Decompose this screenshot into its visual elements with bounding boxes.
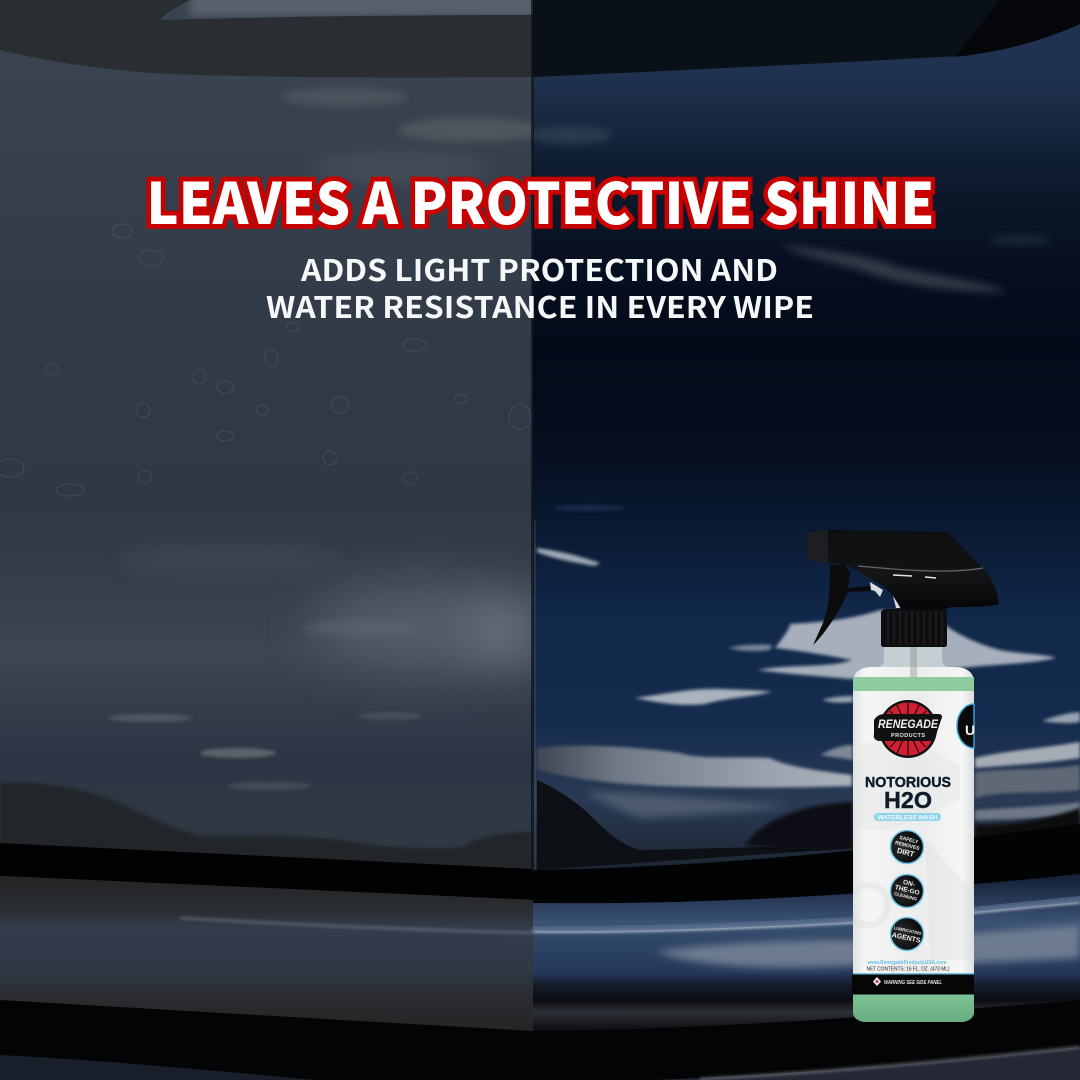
website and net contents: NET CONTENTS: 16 FL. OZ. (473 ML) bbox=[866, 966, 950, 972]
badge: safely removes dirt: REMOVES bbox=[894, 840, 921, 852]
product name bbox=[865, 775, 951, 813]
panel: glossy right half of car hood bbox=[533, 0, 1080, 870]
product name: H2O bbox=[884, 787, 932, 813]
sky clouds reflection bbox=[537, 548, 1080, 870]
trigger lever bbox=[813, 565, 871, 645]
subtitle: ADDS LIGHT PROTECTION AND bbox=[300, 246, 778, 290]
spray trigger head bbox=[807, 530, 999, 645]
badge: lubricating agents: LUBRICATING bbox=[893, 925, 922, 936]
liquid bottom bbox=[853, 994, 974, 1022]
badge: safely removes dirt: DIRT bbox=[896, 846, 916, 859]
badge: safely removes dirt: SAFELY bbox=[899, 835, 919, 846]
badge: lubricating agents bbox=[890, 918, 924, 950]
panel: dull left half of car hood bbox=[0, 0, 550, 1080]
subtitle: WATER RESISTANCE IN EVERY WIPE bbox=[266, 283, 814, 327]
side seal badge bbox=[957, 704, 975, 748]
badge: on-the-go cleaning: CLEANING bbox=[894, 891, 918, 902]
website and net contents bbox=[866, 960, 950, 972]
brand logo bbox=[874, 700, 942, 758]
website and net contents: www.RenegadeProductsUSA.com bbox=[867, 960, 947, 966]
title: leaves a protective shine: LEAVES A PROTECTIVE SHINE bbox=[146, 159, 934, 241]
badge: lubricating agents: AGENTS bbox=[891, 932, 921, 945]
brand logo: RENEGADE bbox=[878, 719, 938, 731]
product: spray bottle bbox=[807, 530, 999, 1022]
liquid band top bbox=[853, 677, 974, 691]
bottle body bbox=[853, 667, 974, 1022]
brand logo: PRODUCTS bbox=[891, 733, 925, 739]
product name: NOTORIOUS bbox=[865, 775, 951, 791]
bottle neck bbox=[878, 645, 948, 667]
spray cap collar bbox=[881, 609, 947, 647]
warning strip bbox=[852, 973, 974, 994]
badge: on-the-go cleaning: THE-GO bbox=[894, 884, 920, 897]
badge: on-the-go cleaning: ON- bbox=[902, 879, 915, 889]
waterless wash pill: WATERLESS WASH bbox=[878, 814, 938, 822]
badge: safely removes dirt bbox=[890, 830, 924, 864]
warning strip: WARNING SEE SIDE PANEL bbox=[884, 980, 942, 986]
side seal badge: U bbox=[965, 722, 975, 738]
label ghost artwork bbox=[862, 864, 964, 960]
badge: on-the-go cleaning bbox=[890, 874, 924, 908]
dip tube bbox=[910, 645, 917, 690]
subtitle bbox=[266, 246, 814, 327]
